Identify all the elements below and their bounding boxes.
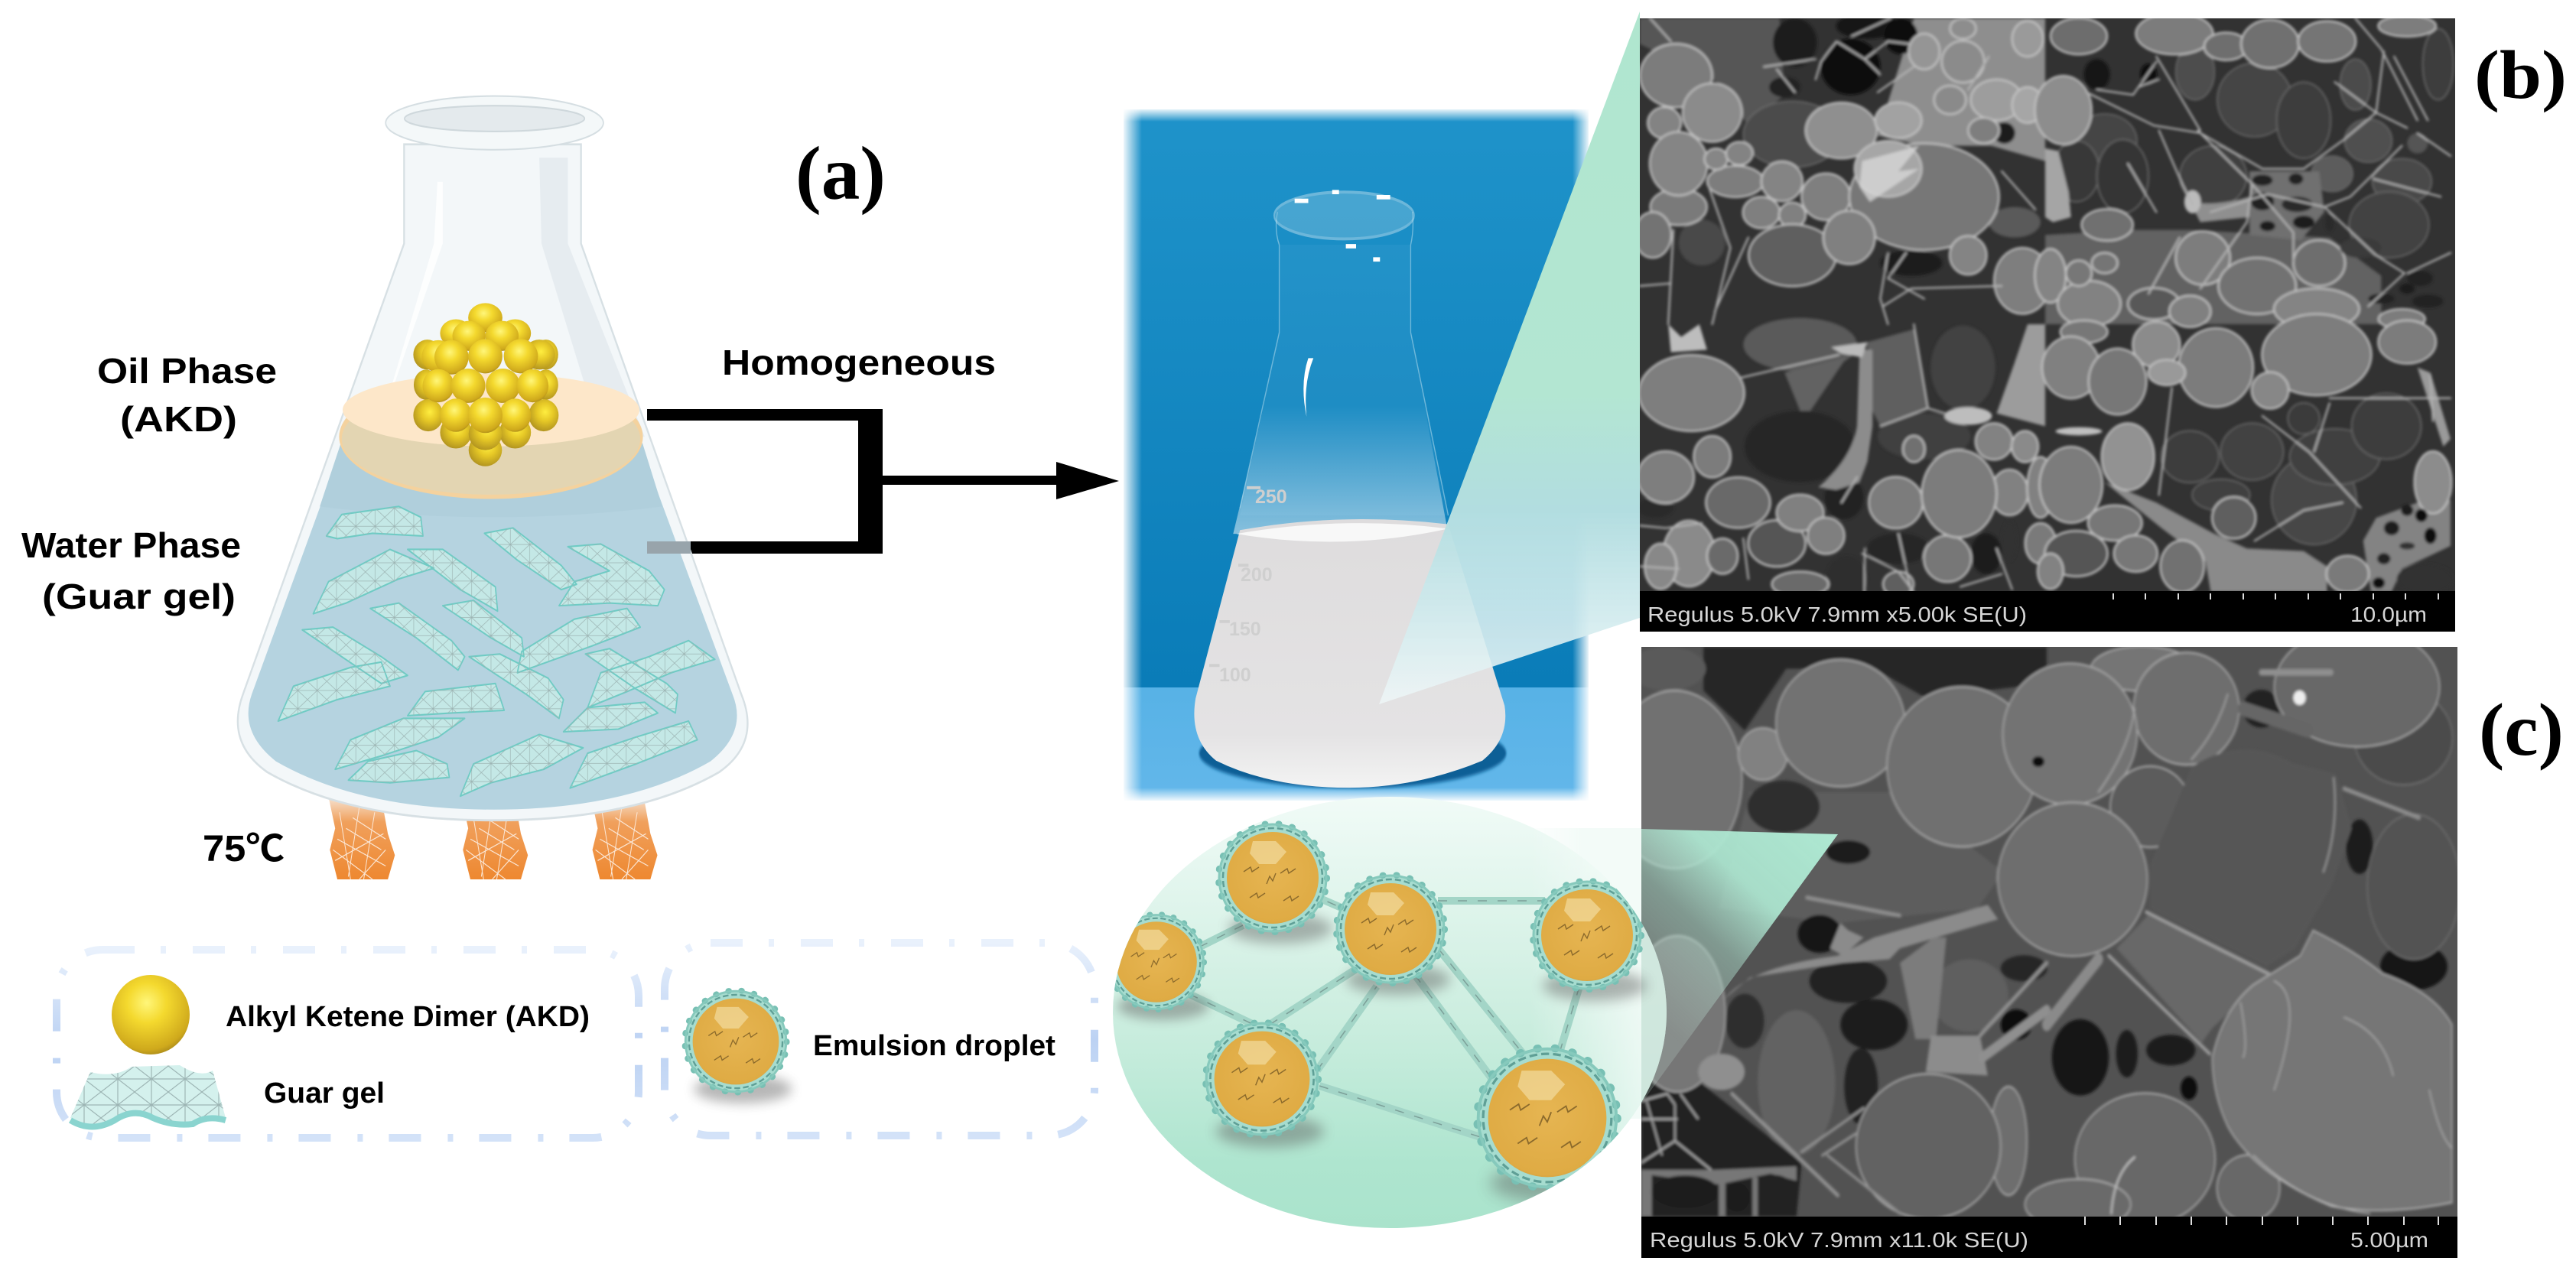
text: emulsion droplet: Emulsion droplet <box>813 1030 1055 1062</box>
panel letter (b): (b) <box>2474 37 2567 113</box>
text: alkyl ketene dimer: Alkyl Ketene Dimer (AKD) <box>226 1001 590 1033</box>
emulsion network circle <box>1109 797 1672 1228</box>
panel letter (a): (a) <box>795 131 886 216</box>
flames, 75 degrees heat source <box>329 798 658 879</box>
connector: top line and bracket <box>647 409 883 554</box>
AKD particle cluster <box>413 303 558 466</box>
label: water phase: Water Phase <box>21 525 241 565</box>
icon: guar gel sheet <box>70 1065 226 1127</box>
graduation marks <box>1219 486 1287 686</box>
SEM c left half <box>1608 647 2047 1219</box>
SEM image (b) <box>1634 13 2455 632</box>
SEM image (c) <box>1641 647 2457 1217</box>
legend: AKD and guar gel <box>57 950 639 1138</box>
photo: emulsion in flask on blue background <box>1122 108 1590 802</box>
scale bar (c): Regulus 5.0kV 7.9mm x11.0k SE(U) <box>1650 1228 2028 1252</box>
SEM b lower right <box>2038 314 2454 594</box>
panel (a): heated flask <box>21 96 1119 879</box>
translucent right side of circle <box>1556 863 1641 1133</box>
label: oil phase: (AKD) <box>120 399 237 439</box>
scale bar (c) <box>1641 1217 2457 1258</box>
arrow to emulsion photo <box>883 462 1119 499</box>
label: water phase <box>21 525 241 616</box>
text: guar gel: Guar gel <box>264 1077 385 1110</box>
SEM c puncture on droplet <box>2032 756 2044 767</box>
scale bar (b) <box>1640 591 2455 632</box>
SEM b upper right <box>2034 13 2454 330</box>
SEM b lower left <box>1638 318 2056 602</box>
magnification wedge: photo to SEM b <box>1379 11 1640 704</box>
graduation marks: 200 <box>1241 564 1273 586</box>
graduation marks: 150 <box>1229 619 1261 640</box>
SEM c right half <box>1998 627 2461 1230</box>
scale bar (b): Regulus 5.0kV 7.9mm x5.00k SE(U) <box>1647 603 2027 626</box>
icon: AKD sphere <box>112 975 190 1054</box>
panel letter (c): (c) <box>2479 689 2564 772</box>
graduation marks: 250 <box>1255 486 1287 508</box>
links between droplets <box>1189 878 1579 1139</box>
circle over SEM c <box>1641 922 1667 1103</box>
label: homogeneous: Homogeneous <box>722 343 996 382</box>
SEM b upper left <box>1634 13 2051 324</box>
scale bar (b): 10.0µm <box>2350 603 2427 626</box>
label: oil phase <box>97 351 277 439</box>
photographed flask <box>1194 192 1506 788</box>
icon: emulsion droplet <box>685 990 792 1103</box>
oil phase disc <box>339 373 643 499</box>
magnification wedge: network to SEM c <box>1641 829 1838 1103</box>
emulsion droplets <box>1109 824 1647 1203</box>
label: oil phase: Oil Phase <box>97 351 277 391</box>
legend: emulsion droplet <box>665 943 1094 1136</box>
guar gel sheets in water phase <box>278 506 715 796</box>
connector: translucent segment inside flask <box>647 541 691 554</box>
graduation marks: 100 <box>1219 664 1251 686</box>
label: temperature: 75℃ <box>203 829 285 869</box>
conical flask <box>238 96 747 820</box>
label: water phase: (Guar gel) <box>42 577 236 616</box>
scale bar (c): 5.00µm <box>2350 1228 2428 1252</box>
pale wedge backing left of SEM c <box>1522 828 1641 1119</box>
